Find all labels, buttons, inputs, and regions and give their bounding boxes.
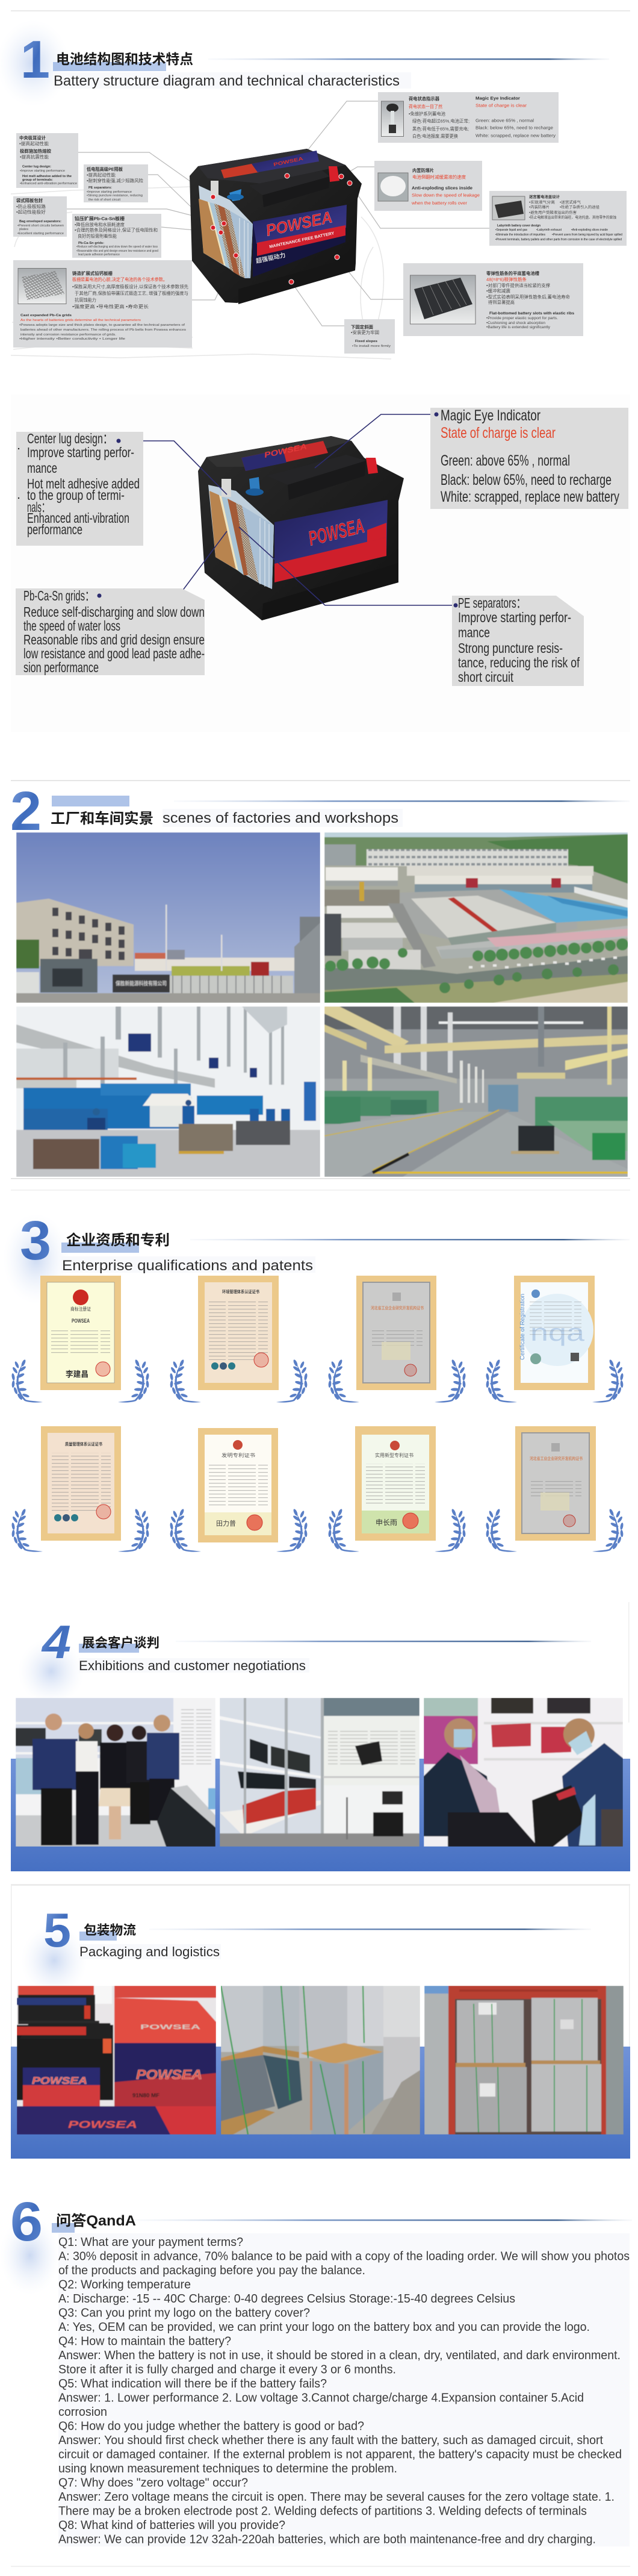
- battery cutaway illustration: 超强驱动力: [255, 251, 286, 265]
- section 1 heading: [0, 20, 609, 107]
- panel: Pb-Ca-Sn grids: 铅压扩展Pb-Ca-Sn板栅: [75, 216, 125, 222]
- panel: center lug: Center lug design:: [22, 165, 51, 169]
- battery illustration with navy callouts: POWSEA: [306, 514, 367, 550]
- Q and A text block: Q6: How do you judge whether the battery is good or bad?: [58, 2419, 364, 2433]
- section 4 heading: [18, 1615, 591, 1704]
- panel: labyrinth cover design: •Anti-exploding slices inside: [571, 228, 608, 232]
- panel: bag enveloped separators: [13, 196, 67, 237]
- panel: flat-bottomed slots: [403, 263, 583, 336]
- battery illustration with navy callouts: POWSEA: [264, 441, 308, 460]
- panel: magic eye indicator: 白色:电池报废,需要更换: [412, 134, 459, 139]
- image: ribs: [410, 275, 475, 324]
- panel: Pb-Ca-Sn grids large: sion performance: [23, 660, 99, 675]
- panel: center lug design: Improve starting perfor-: [27, 444, 134, 460]
- image: lead grid: [18, 269, 66, 304]
- front label: [253, 205, 347, 277]
- section number 6: 6: [10, 2191, 43, 2253]
- panel: bag enveloped separators: •起动性能极好: [16, 210, 46, 214]
- panel: labyrinth cover design: [489, 191, 627, 246]
- panel: labyrinth cover design: 迷宫蓄电池盖设计: [529, 195, 560, 199]
- panel: magic eye indicator: 绿色:荷电超过65%,电池正常;: [412, 118, 469, 124]
- panel: cast expanded grids: batteries ahead of other manufacturers. The rolling process of Pb belts from Powsea enhances: [20, 328, 186, 332]
- panel: cast expanded grids: intensity and corrosion resistance performance of grids.: [20, 333, 116, 337]
- Q and A text block: Answer: We can provide 12v 32ah-220ah batteries, which are both maintenance-free and dry charging.: [58, 2532, 596, 2546]
- Q and A text block: Q4: How to maintain the battery?: [58, 2334, 231, 2348]
- panel: labyrinth cover design: •Prevent users from being injured by acid liquor spilled: [552, 233, 622, 237]
- photo: factory gate: 保胜新能源科技有限公司: [116, 980, 167, 987]
- terminals: [229, 189, 241, 201]
- panel: magic eye indicator: 荷电状态一目了然: [409, 104, 442, 110]
- panel: anti-exploding slices: [374, 161, 482, 211]
- section 4 heading: Exhibitions and customer negotiations: [79, 1658, 306, 1673]
- panel: flat-bottomed slots: 48(=8*6)根弹性筋条: [486, 277, 527, 282]
- panel: bag enveloped separators: Bag enveloped separators:: [19, 220, 61, 223]
- panel: Pb-Ca-Sn grids: Pb-Ca-Sn grids:: [78, 242, 104, 245]
- panel: fixed slopes: Fixed slopes: [355, 340, 377, 343]
- panel: labyrinth cover design: •避免用户受酸液溢出的伤害: [529, 210, 577, 215]
- panel: center lug: 极群施加热熔胶: [20, 148, 52, 154]
- certificate: environmental system: [198, 1276, 279, 1390]
- panel: labyrinth cover design: •Labyrinth exhaust: [536, 228, 562, 232]
- panel: bag enveloped separators: •防止极板短路: [16, 204, 46, 210]
- panel: bag enveloped separators: plates: [19, 228, 28, 231]
- battery cutaway illustration: [190, 149, 362, 304]
- front label: [274, 500, 388, 582]
- section 3 heading: [3, 1210, 630, 1304]
- panel: labyrinth cover design: •迷宫式排气: [560, 200, 581, 205]
- panel: PE separators large: mance: [458, 625, 490, 640]
- Q and A text block: Answer: Zero voltage means the circuit is open. There may be several causes for the zero voltage state. 1.: [58, 2490, 615, 2504]
- panel: Pb-Ca-Sn grids large: low resistance and good lead paste adhe-: [23, 646, 205, 661]
- panel: flat-bottomed slots: 得到显著提高: [488, 300, 515, 305]
- panel: cast expanded grids: [13, 260, 192, 348]
- laurels: [11, 1359, 624, 1552]
- section 6 heading: [0, 2191, 632, 2295]
- panel: center lug: group of terminals:: [22, 178, 53, 182]
- panel: magic eye indicator: Magic Eye Indicator: [475, 96, 520, 101]
- panel: fixed slopes: 下固定斜面: [351, 324, 373, 330]
- panel: labyrinth cover design: Labyrinth battery cover design: [497, 224, 540, 228]
- panel: bag enveloped separators: 袋式隔板包封: [16, 198, 43, 204]
- photo: exhibition team: [16, 1698, 215, 1847]
- certificate: quality system: [41, 1426, 121, 1541]
- photo: aerial view of plant: [324, 832, 628, 1003]
- certificate: NQA registration: nqa: [530, 1320, 585, 1346]
- panel: bag enveloped separators: •Prevent short circuits between: [17, 224, 64, 228]
- panel: cast expanded grids: •强度更高 •导电性更高 •寿命更长: [72, 304, 149, 310]
- cutaway layers: [199, 181, 253, 278]
- section number 2: 2: [10, 781, 42, 842]
- certificate: invention patent: [198, 1428, 278, 1542]
- Q and A text block: There may be a broken electrode post 2. Welding defects of partitions 3. Welding defects of terminals: [58, 2504, 587, 2518]
- callout lines navy: [99, 414, 456, 605]
- section 3 heading: 企业资质和专利: [66, 1232, 170, 1249]
- section number 3: 3: [20, 1210, 51, 1271]
- panel: center lug: 中央极耳设计: [19, 135, 46, 141]
- Q and A text block: A: Yes, OEM can be provided, we can print your logo on the battery box and you can provide the logo.: [58, 2320, 590, 2334]
- section 2 heading: scenes of factories and workshops: [163, 810, 398, 826]
- panel: Pb-Ca-Sn grids: •Reasonable ribs and grid design ensure low resistance and good: [76, 249, 158, 253]
- panel: PE separators: PE separators:: [88, 186, 112, 190]
- section 5 heading: [21, 1903, 591, 1997]
- faint sketch background: [11, 187, 391, 359]
- panel: Pb-Ca-Sn grids large: [16, 588, 205, 675]
- panel: PE separators: •Strong puncture resistance, reducing: [87, 194, 143, 198]
- panel: PE separators large: PE separators：: [458, 595, 525, 611]
- panel: cast expanded grids: As the hearts of batteries grids determine all the technical parameters: [20, 319, 141, 322]
- certificate: research institute: [356, 1276, 436, 1390]
- Q and A text block: corrosion: [58, 2405, 107, 2419]
- panel: Pb-Ca-Sn grids: lead paste adhesion performance: [78, 253, 120, 257]
- Q and A text block: Answer: 1. Lower performance 2. Low voltage 3.Cannot charge/charge 4.Expansion container 5.Acid: [58, 2391, 584, 2404]
- panel: cast expanded grids: 抗腐蚀能力: [75, 298, 96, 302]
- section 5 heading: Packaging and logistics: [79, 1944, 220, 1959]
- panel: magic eye indicator: Black: below 65%, need to recharge: [475, 126, 553, 130]
- certificate: utility model patent: [355, 1426, 436, 1541]
- photo: plate workshop: [16, 1006, 320, 1177]
- certificate: environmental system: 环境管理体系认证证书: [222, 1289, 259, 1294]
- Q and A text block: Answer: You should first check whether there is any fault with the battery, such as damaged circuit, short: [58, 2433, 603, 2447]
- panel: magic eye indicator: •免维护系列蓄电池: [409, 111, 446, 117]
- battery cutaway illustration: POWSEA: [264, 208, 334, 240]
- panel: PE separators large: tance, reducing the risk of: [458, 655, 580, 670]
- panel: center lug design: Center lug design：: [27, 431, 113, 446]
- panel: flat-bottomed slots: •Cushioning and shock absorption: [486, 322, 545, 325]
- certificate: quality system: 质量管理体系认证证书: [65, 1441, 102, 1447]
- panel: cast expanded grids: •Powsea adopts large size and thick plates design, to guarantee all the technical parameters of: [19, 323, 185, 327]
- panel: Pb-Ca-Sn grids large: Pb-Ca-Sn grids：: [23, 588, 94, 603]
- panel: cast expanded grids: •Higher intensity •Better conductivity • Longer life: [19, 337, 125, 341]
- Q and A text block: [58, 2233, 630, 2546]
- callout leader lines: [67, 101, 492, 326]
- section 2 heading: [10, 781, 630, 842]
- Q and A text block: circuit or damaged container. If the external problem is not apparent, the battery's capacity must be checked: [58, 2448, 622, 2461]
- panel: Pb-Ca-Sn grids: •Reduce self-discharging and slow down the speed of water loss: [76, 245, 158, 249]
- panel: center lug design: [16, 431, 143, 546]
- battery cutaway illustration: MAINTENANCE FREE BATTERY: [269, 231, 335, 249]
- panel: PE separators: [84, 164, 148, 202]
- certificate: trademark: [40, 1276, 121, 1390]
- section number 5: 5: [43, 1903, 71, 1957]
- panel: PE separators: •耐刺穿性能强,减少短路风险: [87, 178, 144, 183]
- panel: flat-bottomed slots: Flat-bottomed battery slots with elastic ribs: [489, 312, 575, 316]
- panel: cast expanded grids: 于其他厂商,保胜铅带碾压式锻造工艺, 增强了板栅的强度与: [75, 290, 188, 296]
- panel: Pb-Ca-Sn grids large: the speed of water loss: [23, 618, 120, 634]
- image: cover: [492, 196, 525, 220]
- panel: center lug design: Hot melt adhesive added: [27, 476, 140, 491]
- section 2 heading: 工厂和车间实景: [51, 811, 153, 827]
- panel: cast expanded grids: 板栅是蓄电池的心脏,决定了电池的各个技术参数。: [72, 277, 167, 282]
- photo: battery boxes: POWSEA: [68, 2119, 137, 2130]
- panel: center lug: •Improve starting performance: [20, 169, 65, 173]
- Q and A text block: of the products and packaging before you pay the balance.: [58, 2263, 365, 2277]
- photo: battery boxes: 91N80 MF: [132, 2092, 160, 2098]
- Q and A text block: Answer: When the battery is not in use, it should be stored in a clean, dry, ventilated, and dark environment.: [58, 2348, 621, 2362]
- panel: PE separators: 低电阻高级PE隔板: [87, 166, 123, 172]
- panel: labyrinth cover design: •Prevent terminals, battery pallets and other parts from corrosion in the case of electrolyte spilled: [495, 238, 622, 242]
- certificate: trademark: 李建昌: [66, 1370, 88, 1379]
- panel: magic eye indicator large: State of charge is clear: [441, 425, 556, 441]
- second diagram background: [11, 395, 630, 732]
- photo: customer negotiation: [424, 1698, 623, 1847]
- certificate: research institute: 河北省工业企业研究开发机构证书: [371, 1305, 424, 1311]
- certificate: research institute copy: [515, 1426, 596, 1541]
- photo: assembly hall: [324, 1006, 628, 1177]
- panel: center lug: [16, 133, 78, 188]
- panel: bag enveloped separators: •Excellent starting performance: [17, 232, 64, 235]
- photo: loaded container: [424, 1986, 624, 2135]
- callout markers: [211, 173, 352, 284]
- panel: flat-bottomed slots: 零弹性筋条的平底蓄电池槽: [486, 271, 540, 276]
- panel: labyrinth cover design: •Eliminate the introduction of impurities: [495, 233, 545, 237]
- battery cutaway illustration: POWSEA: [273, 156, 304, 167]
- certificate: trademark: POWSEA: [72, 1318, 90, 1324]
- certificate: invention patent: 发明专利证书: [221, 1452, 255, 1458]
- certificate: utility model patent: 申长雨: [376, 1518, 397, 1527]
- panel: labyrinth cover design: •防止电解液溢出带来的端柱、电池托盘、其他零件的腐蚀: [529, 215, 616, 220]
- panel: magic eye indicator large: [430, 407, 628, 509]
- section number 4: 4: [41, 1615, 71, 1668]
- panel: magic eye indicator large: Green: above 65% , normal: [441, 452, 570, 469]
- English subtitle: Battery structure diagram and technical characteristics: [54, 73, 400, 89]
- photo: exhibition booth: [220, 1698, 420, 1847]
- panel: center lug: •提高抗震性能: [20, 154, 49, 160]
- Q and A text block: Q3: Can you print my logo on the battery cover?: [58, 2306, 310, 2320]
- photo: wrapped pallets: [221, 1986, 420, 2135]
- panel: flat-bottomed slots: •Provide proper elastic support for parts.: [486, 317, 558, 320]
- panel: center lug: •提高起动性能: [19, 141, 49, 146]
- blue band behind packaging photos: [11, 2047, 630, 2159]
- panel: cast expanded grids: Cast expanded Pb-Ca grids: [20, 314, 72, 317]
- panel: center lug design: Enhanced anti-vibration: [27, 510, 129, 526]
- Q and A text block: Q2: Working temperature: [58, 2278, 191, 2291]
- panel: center lug: •Enhanced anti-vibration performance: [20, 182, 77, 186]
- Chinese title: 电池结构图和技术特点: [56, 51, 193, 67]
- panel: PE separators large: [452, 595, 584, 686]
- panel: Pb-Ca-Sn grids large: Reduce self-discharging and slow down: [23, 604, 205, 620]
- certificate: utility model patent: 实用新型专利证书: [375, 1452, 413, 1458]
- Q and A text block: Q5: What indication will there be if the battery fails?: [58, 2377, 327, 2390]
- photo: battery boxes: POWSEA: [136, 2067, 202, 2082]
- section 5 heading: 包装物流: [84, 1923, 136, 1938]
- panel: center lug: Hot melt adhesive added to the: [22, 175, 72, 178]
- panel: PE separators large: Improve starting perfor-: [458, 610, 571, 625]
- Q and A text block: A: Discharge: -15 -- 40C Charge: 0-40 degrees Celsius Storage:-15-40 degrees Celsius: [58, 2292, 515, 2306]
- certificate: NQA registration: Certificate of Registration: [519, 1294, 526, 1360]
- blue band behind exhibition photos: [11, 1759, 630, 1871]
- panel: labyrinth cover design: •实现液气分离: [529, 200, 555, 205]
- panel: anti-exploding slices: Anti-exploding slices inside: [412, 187, 472, 190]
- panel: PE separators large: short circuit: [458, 669, 513, 685]
- Q and A text block: Q8: What kind of batteries will you provide?: [58, 2518, 285, 2532]
- section 4 heading: 展会客户谈判: [82, 1635, 160, 1650]
- panel: flat-bottomed slots: •缓冲和减震: [486, 288, 511, 294]
- panel: PE separators large: Strong puncture resis-: [458, 640, 563, 656]
- panel: anti-exploding slices: Slow down the speed of leakage: [412, 194, 480, 198]
- image: magic eye: [382, 101, 403, 136]
- panel: labyrinth cover design: •内装防爆片: [529, 205, 550, 210]
- panel: PE separators: •Improve starting performance: [87, 190, 132, 194]
- panel: magic eye indicator large: Magic Eye Indicator: [441, 407, 540, 424]
- panel: cast expanded grids: •保胜采用大尺寸,高厚度极板设计,以保证各个技术参数领先: [72, 284, 188, 289]
- panel: center lug design: to the group of termi-: [27, 487, 125, 503]
- panel: fixed slopes: •To install more firmly: [352, 345, 391, 348]
- photo: battery boxes: POWSEA: [140, 2024, 200, 2031]
- certificate: research institute copy: 河北省工业企业研究开发机构证书: [530, 1456, 583, 1461]
- certificate: trademark: 商标注册证: [70, 1306, 91, 1312]
- Q and A text block: Q1: What are your payment terms?: [58, 2235, 243, 2249]
- panel: Pb-Ca-Sn grids: 良好的铅膏附着性能: [78, 234, 117, 239]
- panel: anti-exploding slices: 电池倒翻时减缓漏液的速度: [412, 175, 466, 179]
- panel: labyrinth cover design: •杜绝了杂质引入的途径: [560, 205, 599, 210]
- panel: labyrinth cover design: •Separate liquid and gas: [495, 228, 527, 232]
- panel: magic eye indicator: 黑色:荷电低于65%,需要充电;: [412, 126, 469, 131]
- panel: magic eye indicator: [378, 92, 559, 143]
- Q and A text block: using known measurement techniques to determine the problem.: [58, 2462, 397, 2475]
- section 3 heading: Enterprise qualifications and patents: [62, 1258, 313, 1274]
- panel: Pb-Ca-Sn grids large: Reasonable ribs and grid design ensure: [23, 632, 205, 647]
- panel: PE separators: the risk of short circuit: [88, 198, 121, 202]
- image: white slice: [378, 173, 408, 201]
- battery illustration with navy callouts: [198, 436, 404, 620]
- photo: battery boxes: [17, 1986, 216, 2135]
- panel: flat-bottomed slots: •型式实验表明采用弹性筋条后,蓄电池寿命: [486, 294, 571, 300]
- photo: battery boxes: POWSEA: [32, 2075, 87, 2086]
- panel: Pb-Ca-Sn grids: •合理的筋条及网格设计,保证了低电阻性和: [75, 228, 158, 232]
- panel: flat-bottomed slots: •对部门零件提供适当松紧的支撑: [486, 283, 551, 288]
- panel: anti-exploding slices: 内置防爆片: [412, 167, 434, 173]
- panel: magic eye indicator: Green: above 65% , normal: [475, 119, 534, 123]
- panel: fixed slopes: •安装更为牢固: [351, 330, 379, 335]
- Q and A text block: Store it after it is fully charged and charge it every 3 or 6 months.: [58, 2362, 396, 2377]
- Q and A text block: Q7: Why does "zero voltage" occur?: [58, 2475, 248, 2490]
- panel: center lug design: mance: [27, 460, 57, 476]
- panel: center lug design: performance: [27, 522, 82, 537]
- panel: magic eye indicator: White: scrapped, replace new battery: [475, 134, 556, 139]
- certificate: invention patent: 田力普: [216, 1519, 236, 1527]
- panel: magic eye indicator: State of charge is clear: [475, 104, 527, 108]
- certificate: NQA registration: [514, 1276, 595, 1390]
- section 6 heading: 问答QandA: [56, 2213, 136, 2229]
- panel: Pb-Ca-Sn grids: [72, 214, 161, 258]
- cutaway layers: [208, 479, 274, 589]
- panel: fixed slopes: [344, 319, 395, 354]
- photo: factory gate: [16, 832, 320, 1003]
- panel: flat-bottomed slots: •Battery life is extended significantly: [486, 326, 550, 329]
- panel: anti-exploding slices: when the battery rolls over: [411, 201, 468, 206]
- panel: cast expanded grids: 铸造扩展式铅钙板栅: [72, 271, 113, 276]
- panel: center lug design: nals：: [27, 499, 49, 515]
- panel: PE separators: •提高起动性能: [87, 172, 116, 178]
- panel: magic eye indicator: 荷电状态指示器: [409, 96, 440, 101]
- panel: Pb-Ca-Sn grids: •降低自放电和水损耗速度: [75, 222, 125, 228]
- section number 1: 1: [20, 30, 50, 89]
